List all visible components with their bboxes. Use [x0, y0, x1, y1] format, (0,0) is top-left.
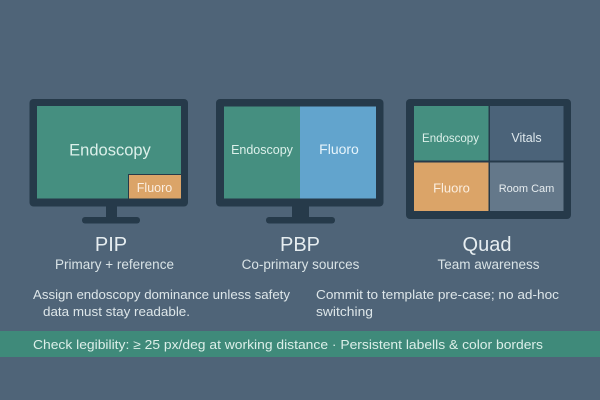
- note: endoscopy dominance: data must stay readable.: [43, 305, 190, 319]
- pane: Endoscopy: Endoscopy: [231, 143, 294, 157]
- panel: PIP monitor: [30, 99, 188, 224]
- inset: Fluoro: [128, 174, 181, 198]
- banner: legibility check: [0, 331, 600, 357]
- note: commit to template: switching: [316, 305, 373, 319]
- pane: Room Cam: [490, 162, 564, 211]
- pane: Endoscopy: Endoscopy: [422, 133, 479, 145]
- pane: Vitals: Vitals: [511, 131, 542, 145]
- label: Endoscopy main view: Endoscopy: [69, 142, 152, 160]
- caption: PIP: Primary + reference: [55, 257, 174, 272]
- pane: Room Cam: Room Cam: [499, 183, 554, 195]
- pane: Fluoro: [300, 106, 376, 198]
- caption: PBP: Co-primary sources: [242, 257, 360, 272]
- inset: Fluoro: Fluoro: [137, 181, 172, 195]
- panel: PBP monitor: [216, 99, 384, 224]
- panel: Quad monitor: [406, 99, 571, 219]
- caption: Quad: Team awareness: [437, 257, 540, 272]
- pane: Endoscopy: [224, 106, 300, 198]
- pane: Endoscopy: [414, 106, 488, 160]
- pane: Vitals: [490, 106, 564, 160]
- heading: PBP: PBP: [280, 234, 320, 256]
- pane: Fluoro: Fluoro: [319, 141, 359, 157]
- pane: Fluoro: [414, 162, 488, 211]
- heading: PIP: PIP: [95, 234, 127, 256]
- note: commit to template: Commit to template pre-case; no ad-hoc: [316, 288, 559, 302]
- heading: Quad: Quad: [463, 234, 511, 256]
- pane: Fluoro: Fluoro: [433, 180, 470, 196]
- note: endoscopy dominance: Assign endoscopy dominance unless safety: [33, 288, 291, 302]
- banner: legibility check: Check legibility: ≥ 25 px/deg at working distance · Persistent labells & color borders: [33, 337, 544, 352]
